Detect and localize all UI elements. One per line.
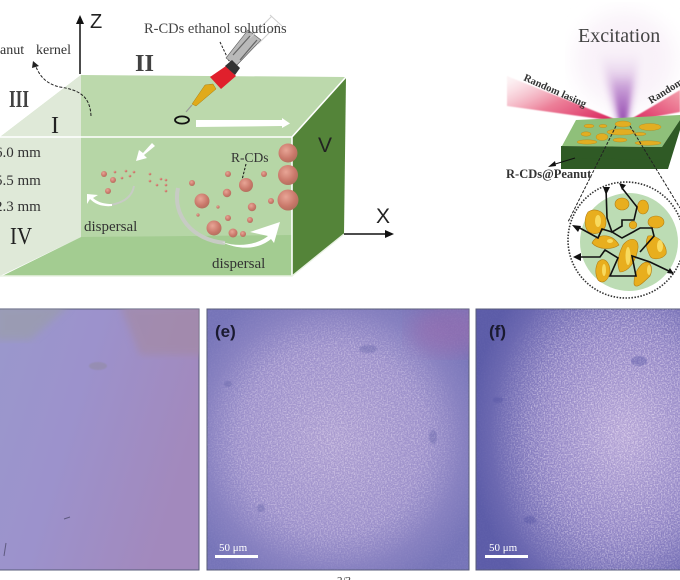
icon: injection ring xyxy=(175,116,189,124)
speckle texture xyxy=(207,309,469,570)
panel: random lasing schematic xyxy=(506,12,680,298)
magnified circle xyxy=(568,182,680,298)
scale bar: 50 μm xyxy=(489,542,518,554)
face labels: II xyxy=(135,51,154,77)
laser beam right xyxy=(626,90,680,122)
R-CDs particles xyxy=(101,144,298,238)
dark spots xyxy=(224,345,437,512)
scale bar: 50 μm xyxy=(219,542,248,554)
face labels: IV xyxy=(10,224,33,250)
label: R-CDs with pointer: R-CDs xyxy=(231,150,269,165)
panel: micrograph (f) xyxy=(476,309,680,570)
label: R-CDs ethanol solutions: R-CDs ethanol solutions xyxy=(144,21,287,37)
arrow: injection white arrow xyxy=(136,143,155,161)
label: f: (f) xyxy=(489,322,506,341)
axis: X: X xyxy=(376,205,390,228)
peanut slab xyxy=(561,115,680,169)
face labels xyxy=(9,51,332,250)
label: peanut kernel with arrow: kernel xyxy=(36,43,71,58)
label: Random lasing left: Random lasing xyxy=(522,73,589,110)
purple tint top right xyxy=(416,309,469,360)
zoom guide lines xyxy=(568,126,680,222)
excitation beam xyxy=(600,50,640,122)
face labels: V xyxy=(318,134,332,157)
label: e: (e) xyxy=(215,322,236,341)
speckle texture xyxy=(476,309,680,570)
face labels: I xyxy=(51,113,59,139)
label: R-CDs@Peanut with arrow xyxy=(506,158,592,181)
excitation beam core xyxy=(613,75,633,122)
grey arc flows xyxy=(110,186,225,243)
label: peanut kernel with arrow: anut xyxy=(0,43,24,58)
dimension labels xyxy=(0,145,41,215)
dark spots xyxy=(493,356,647,524)
panel: micrograph (d) xyxy=(0,305,205,570)
arrow: X-direction white arrow xyxy=(196,118,290,128)
axis: Z: Z xyxy=(90,11,102,33)
icon: syringe xyxy=(186,15,282,112)
face labels: III xyxy=(9,87,29,113)
label: R-CDs@Peanut with arrow: R-CDs@Peanut xyxy=(506,167,592,181)
excitation halo xyxy=(575,12,675,108)
laser beam left xyxy=(507,76,622,122)
label: dispersal left: dispersal xyxy=(84,219,137,235)
micrograph details xyxy=(0,305,205,556)
panel: 3D peanut kernel schematic xyxy=(0,11,394,276)
label: R-CDs with pointer xyxy=(231,150,269,180)
back wall and floor of the box xyxy=(0,75,346,276)
axis: Z xyxy=(76,11,102,74)
axis: X xyxy=(344,205,394,238)
label: dispersal right: dispersal xyxy=(212,256,265,272)
label: peanut kernel with arrow xyxy=(0,43,91,116)
scale bar xyxy=(215,542,258,558)
scale bar xyxy=(485,542,528,558)
arrows: dispersal white curves xyxy=(87,194,280,248)
title: Excitation: Excitation xyxy=(578,25,660,47)
panel: micrograph (e) xyxy=(207,305,490,570)
